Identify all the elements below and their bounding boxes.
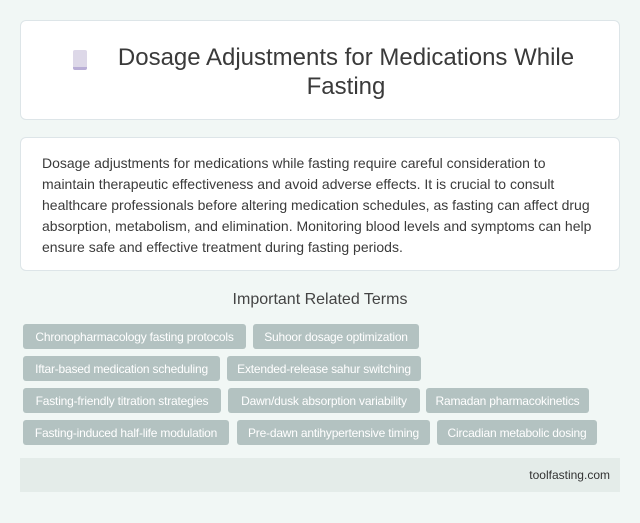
tags: Pre-dawn antihypertensive timing (248, 426, 419, 440)
tags: Iftar-based medication scheduling (35, 362, 208, 376)
tags: Fasting-friendly titration strategies (36, 394, 208, 408)
description text: Dosage adjustments for medications while fasting require careful consideration to maintain therapeutic effectiveness and avoid adverse effects. It is crucial to consult healthcare professionals before altering medication schedules, as fasting can affect drug absorption, metabolism, and elimination. Monitoring blood levels and symptoms can help ensure safe and effective treatment during fasting periods. (42, 155, 591, 255)
tags: Chronopharmacology fasting protocols (35, 330, 234, 344)
icon: document (73, 50, 87, 70)
footer text: toolfasting.com (529, 468, 610, 482)
description panel (20, 137, 620, 271)
tags: Extended-release sahur switching (237, 362, 411, 376)
tags: Suhoor dosage optimization (264, 330, 408, 344)
tags: Dawn/dusk absorption variability (241, 394, 407, 408)
tags: Fasting-induced half-life modulation (35, 426, 217, 440)
header panel (20, 20, 620, 120)
title: Dosage Adjustments for Medications While Fasting (118, 44, 574, 100)
tags: Ramadan pharmacokinetics (436, 394, 579, 408)
footer (20, 458, 620, 492)
tags: Circadian metabolic dosing (448, 426, 586, 440)
section heading: Important Related Terms (233, 291, 407, 308)
